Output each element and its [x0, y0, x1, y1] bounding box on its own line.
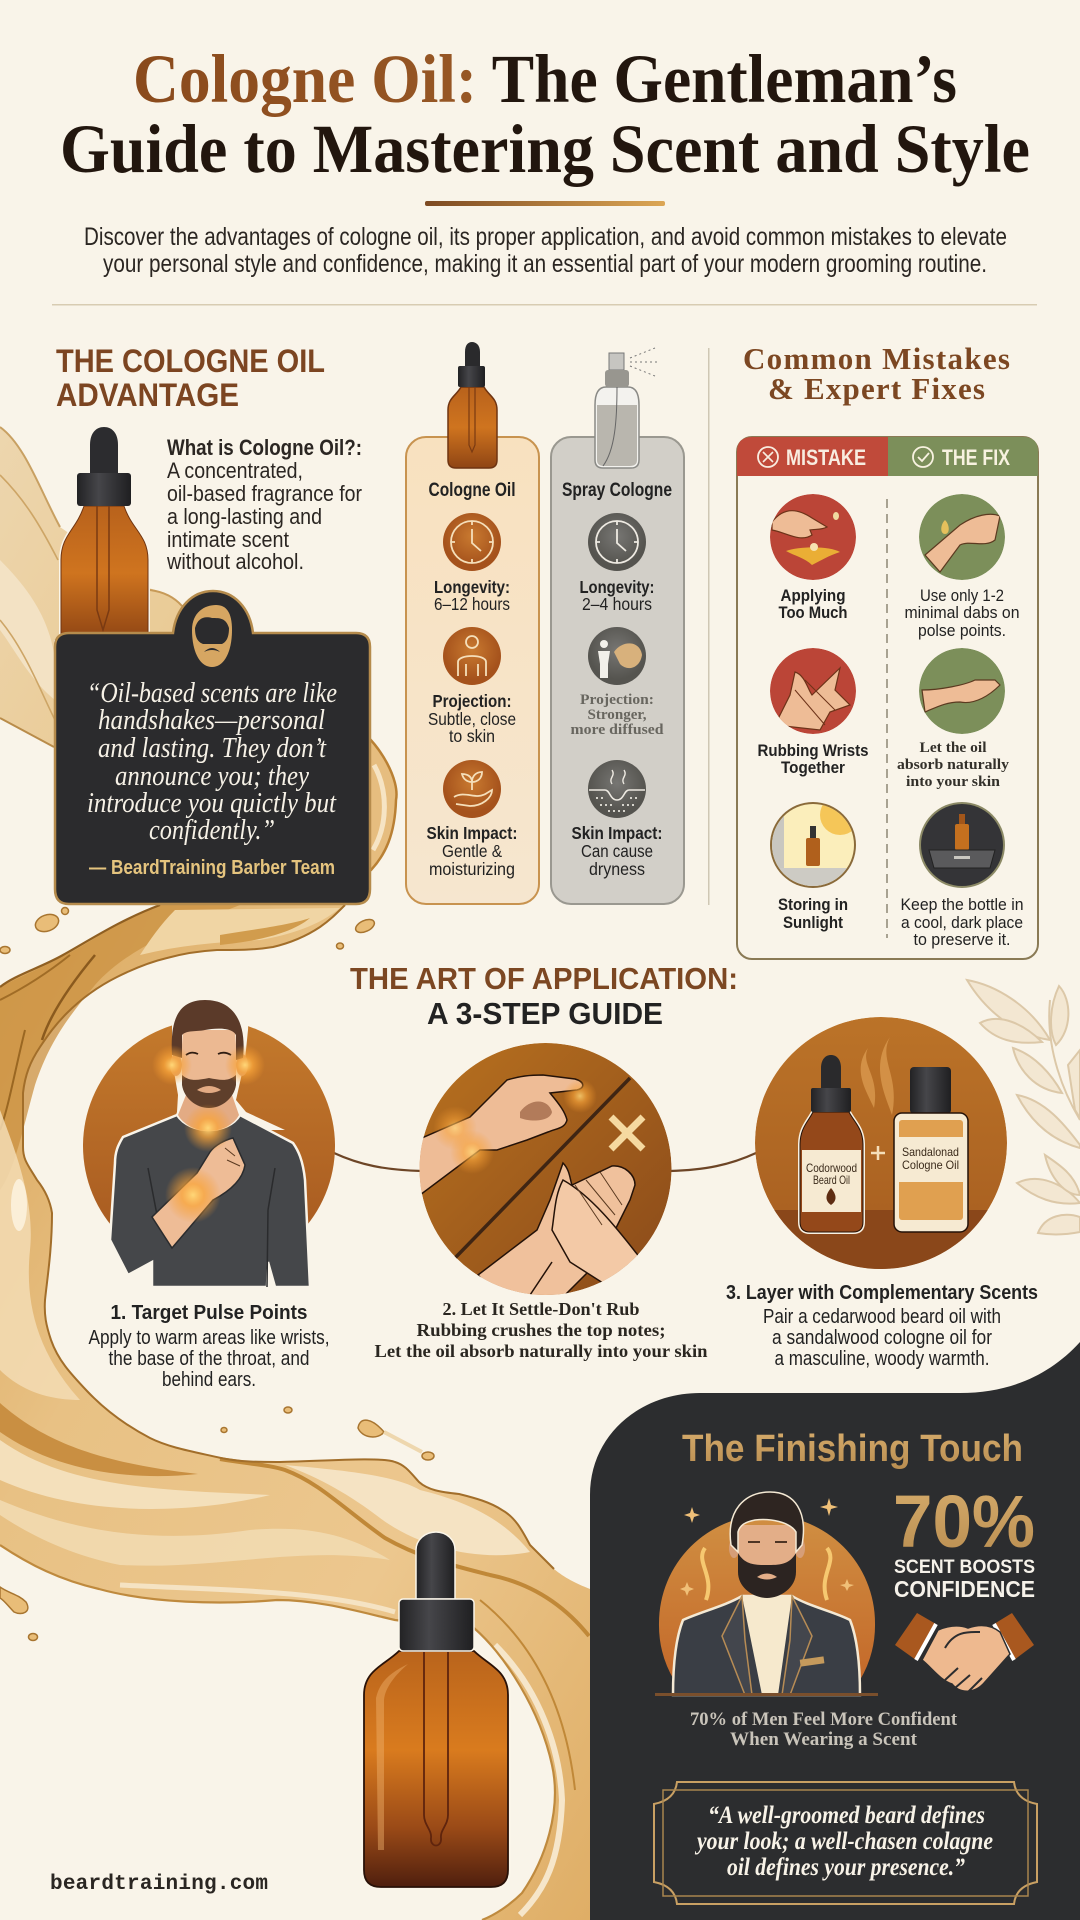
text: use only 1-2 dabs: minimal dabs on — [904, 603, 1020, 622]
illustration: confident man — [655, 1492, 878, 1696]
heading: the cologne oil advantage — [56, 343, 325, 413]
text: applying too much: Too Much — [778, 604, 848, 622]
head and neck halo — [170, 996, 285, 1130]
header rule — [52, 304, 1037, 306]
pulse point glows — [152, 1045, 265, 1223]
title — [60, 41, 1030, 187]
step 3 text: a masculine, woody warmth. — [774, 1348, 990, 1370]
icon: bottle in drawer — [919, 802, 1005, 888]
step 2 text: 2. Let It Settle-Don't Rub — [442, 1299, 640, 1319]
cedarwood bottle: Codorwood — [806, 1161, 857, 1175]
text: let the oil absorb: into your skin — [906, 774, 1001, 790]
twist shading — [0, 905, 240, 1190]
skin impact text: moisturizing — [429, 859, 515, 879]
icon: handshake — [895, 1613, 1034, 1692]
stat caption — [690, 1709, 958, 1750]
icon: person — [443, 627, 501, 685]
heading: the cologne oil advantage: ADVANTAGE — [56, 377, 239, 413]
text: rubbing wrists together: Rubbing Wrists — [758, 742, 868, 760]
icon: large dropper bottle — [364, 1532, 508, 1887]
panel: the finishing touch — [590, 1342, 1080, 1920]
text: keep the bottle cool: Keep the bottle in — [900, 895, 1024, 914]
intro text — [84, 223, 1007, 278]
skin impact text — [572, 823, 662, 879]
stat caption: 70% of Men Feel More Confident — [690, 1709, 958, 1730]
stat: 70%: 70% — [893, 1480, 1035, 1563]
x mark — [611, 1117, 643, 1149]
projection text: to skin — [449, 726, 495, 746]
longevity text: 6–12 hours — [434, 594, 510, 614]
title underline — [425, 201, 665, 206]
stat caption: When Wearing a Scent — [730, 1729, 918, 1750]
stat label — [894, 1557, 1035, 1602]
header: the fix: THE FIX — [942, 445, 1010, 470]
panel: mistakes and fixes table — [737, 437, 1038, 959]
text: let the oil absorb: absorb naturally — [897, 757, 1010, 773]
quote attribution: — BeardTraining Barber Team — [89, 857, 335, 879]
lower rubbing hands — [478, 1163, 635, 1300]
decorative leaves — [967, 980, 1080, 1234]
step 3 text: Pair a cedarwood beard oil with — [763, 1306, 1001, 1328]
heading: the cologne oil advantage: THE COLOGNE OIL — [56, 343, 325, 379]
text: keep the bottle cool — [900, 895, 1024, 949]
heading: The Finishing Touch — [682, 1428, 1023, 1470]
wrist glows — [434, 1109, 475, 1148]
step 1 text — [88, 1302, 330, 1391]
icon: bearded face — [192, 605, 232, 667]
quote text: oil defines your presence.” — [727, 1854, 965, 1881]
projection text: more diffused — [570, 722, 664, 738]
projection text: Subtle, close — [428, 709, 516, 729]
step 3 text: a sandalwood cologne oil for — [772, 1327, 992, 1349]
quote text: “Oil-based scents are like — [87, 678, 337, 709]
icon: scent cloud — [588, 627, 646, 685]
projection text — [428, 691, 516, 746]
text: keep the bottle cool: a cool, dark place — [901, 913, 1023, 932]
step 3 illustration: layering bottles — [755, 1017, 1007, 1269]
closing quote frame — [654, 1782, 1037, 1904]
heading: common mistakes: Common Mistakes — [743, 341, 1010, 376]
stat label: CONFIDENCE — [894, 1576, 1035, 1602]
decorative oil stream, main S-curve — [0, 905, 590, 1920]
quote text: “A well-groomed beard defines — [708, 1802, 985, 1829]
heading: art of application: A 3-STEP GUIDE — [427, 996, 663, 1031]
skin impact text: dryness — [589, 859, 645, 879]
text: let the oil absorb — [897, 740, 1010, 790]
stream outlines — [0, 1545, 555, 1920]
cedarwood bottle: Beard Oil — [813, 1173, 850, 1187]
text: use only 1-2 dabs: polse points. — [918, 621, 1006, 640]
heading: art of application — [350, 961, 738, 1031]
text: storing in sunlight — [778, 896, 848, 932]
projection text — [570, 692, 664, 738]
neck and head — [178, 1095, 239, 1131]
label: Spray Cologne — [562, 480, 672, 501]
text: applying too much — [778, 587, 848, 622]
text: use only 1-2 dabs: Use only 1-2 — [920, 586, 1004, 605]
quote text: introduce you quictly but — [87, 788, 337, 819]
quote text: and lasting. They don’t — [98, 733, 327, 764]
heading: art of application: THE ART OF APPLICATION: — [350, 961, 738, 996]
longevity text: 2–4 hours — [582, 594, 652, 614]
diagonal divider — [455, 1078, 630, 1258]
header: mistake: MISTAKE — [786, 445, 866, 470]
text: rubbing wrists together: Together — [781, 759, 846, 777]
panel: spray cologne column — [551, 348, 684, 904]
projection text: Projection: — [432, 691, 512, 711]
what is cologne oil text: What is Cologne Oil?: — [167, 435, 362, 460]
label: Cologne Oil — [428, 480, 516, 501]
step 1 illustration: man with pulse points — [83, 996, 335, 1287]
sandalwood bottle: Sandalonad — [902, 1145, 959, 1159]
what is cologne oil text: oil-based fragrance for — [167, 481, 362, 506]
icon: skin dryness — [588, 760, 646, 818]
skin impact text: Skin Impact: — [426, 823, 518, 843]
arm and hand — [152, 1138, 245, 1248]
icon: drop on wrist — [919, 494, 1005, 580]
text: let the oil absorb: Let the oil — [920, 740, 986, 756]
panel: barber quote card — [55, 591, 370, 904]
text: rubbing wrists together — [758, 742, 868, 777]
icon: amber bottle — [448, 342, 497, 468]
sandalwood bottle: Cologne Oil — [902, 1158, 959, 1172]
cedarwood bottle — [800, 1055, 863, 1232]
icon: hand with leaves — [443, 760, 501, 818]
icon: bottle in sunlight — [770, 802, 856, 888]
step 1 text: 1. Target Pulse Points — [110, 1302, 308, 1324]
sandalwood bottle — [894, 1067, 968, 1232]
skin impact text: Can cause — [581, 841, 653, 861]
icon: grey clock — [588, 513, 646, 571]
longevity text — [580, 577, 654, 614]
icon: open palm — [919, 648, 1005, 734]
projection text: Projection: — [580, 692, 654, 708]
what is cologne oil text: without alcohol. — [166, 549, 304, 574]
projection text: Stronger, — [588, 707, 647, 723]
icon: rubbing wrists — [770, 648, 856, 734]
icon: too much oil — [770, 494, 856, 580]
stat label: SCENT BOOSTS — [894, 1557, 1035, 1578]
title: Guide to Mastering Scent and Style — [60, 111, 1030, 187]
quote text: confidently.” — [149, 815, 275, 846]
website: beardtraining.com — [50, 1873, 268, 1896]
step 2 text — [374, 1299, 708, 1361]
icon: clock — [443, 513, 501, 571]
longevity text: Longevity: — [580, 577, 654, 597]
step 1 text: the base of the throat, and — [108, 1348, 310, 1370]
text: keep the bottle cool: to preserve it. — [914, 930, 1010, 949]
what is cologne oil text: A concentrated, — [167, 458, 303, 483]
step 2 text: Rubbing crushes the top notes; — [416, 1320, 666, 1340]
step 3 text: 3. Layer with Complementary Scents — [726, 1282, 1038, 1304]
step 2 text: Let the oil absorb naturally into your skin — [374, 1341, 708, 1361]
decorative oil stream, upper — [0, 427, 397, 870]
panel: cologne oil column — [406, 342, 539, 904]
column divider — [708, 348, 710, 905]
step 1 text: Apply to warm areas like wrists, — [88, 1327, 330, 1349]
step connectors — [334, 1153, 756, 1171]
what is cologne oil text: a long-lasting and — [167, 504, 322, 529]
title: Cologne Oil: The Gentleman’s — [133, 41, 957, 117]
icon: spray bottle — [595, 348, 660, 468]
quote text: announce you; they — [115, 761, 309, 792]
plus sign — [871, 1146, 885, 1160]
longevity text — [434, 577, 510, 614]
quote text — [694, 1802, 993, 1881]
droplet trail — [384, 1432, 422, 1452]
lower lobes — [0, 1403, 198, 1476]
step 1 text: behind ears. — [162, 1369, 256, 1391]
heading: common mistakes: & Expert Fixes — [768, 371, 985, 406]
oil droplets — [0, 908, 434, 1640]
text: use only 1-2 dabs — [904, 586, 1020, 640]
skin impact text: Skin Impact: — [572, 823, 662, 843]
header: mistake — [737, 437, 888, 476]
quote text: handshakes—personal — [98, 705, 325, 736]
skin impact text: Gentle & — [442, 841, 502, 861]
upper pointing hand — [410, 1075, 583, 1200]
heading: common mistakes — [743, 341, 1010, 406]
longevity text: Longevity: — [434, 577, 510, 597]
text: storing in sunlight: Sunlight — [783, 914, 843, 932]
skin impact text — [426, 823, 518, 879]
text: storing in sunlight: Storing in — [778, 896, 848, 914]
text: applying too much: Applying — [780, 587, 846, 605]
quote text: your look; a well-chasen colagne — [694, 1828, 993, 1855]
what is cologne oil text — [166, 435, 362, 574]
quote text — [87, 678, 337, 846]
step 2 illustration: hands — [410, 1043, 672, 1300]
icon: dropper bottle — [61, 427, 148, 640]
what is cologne oil text: intimate scent — [167, 527, 289, 552]
header: the fix — [888, 437, 1038, 476]
torso — [110, 1115, 310, 1287]
step 3 text — [726, 1282, 1038, 1370]
